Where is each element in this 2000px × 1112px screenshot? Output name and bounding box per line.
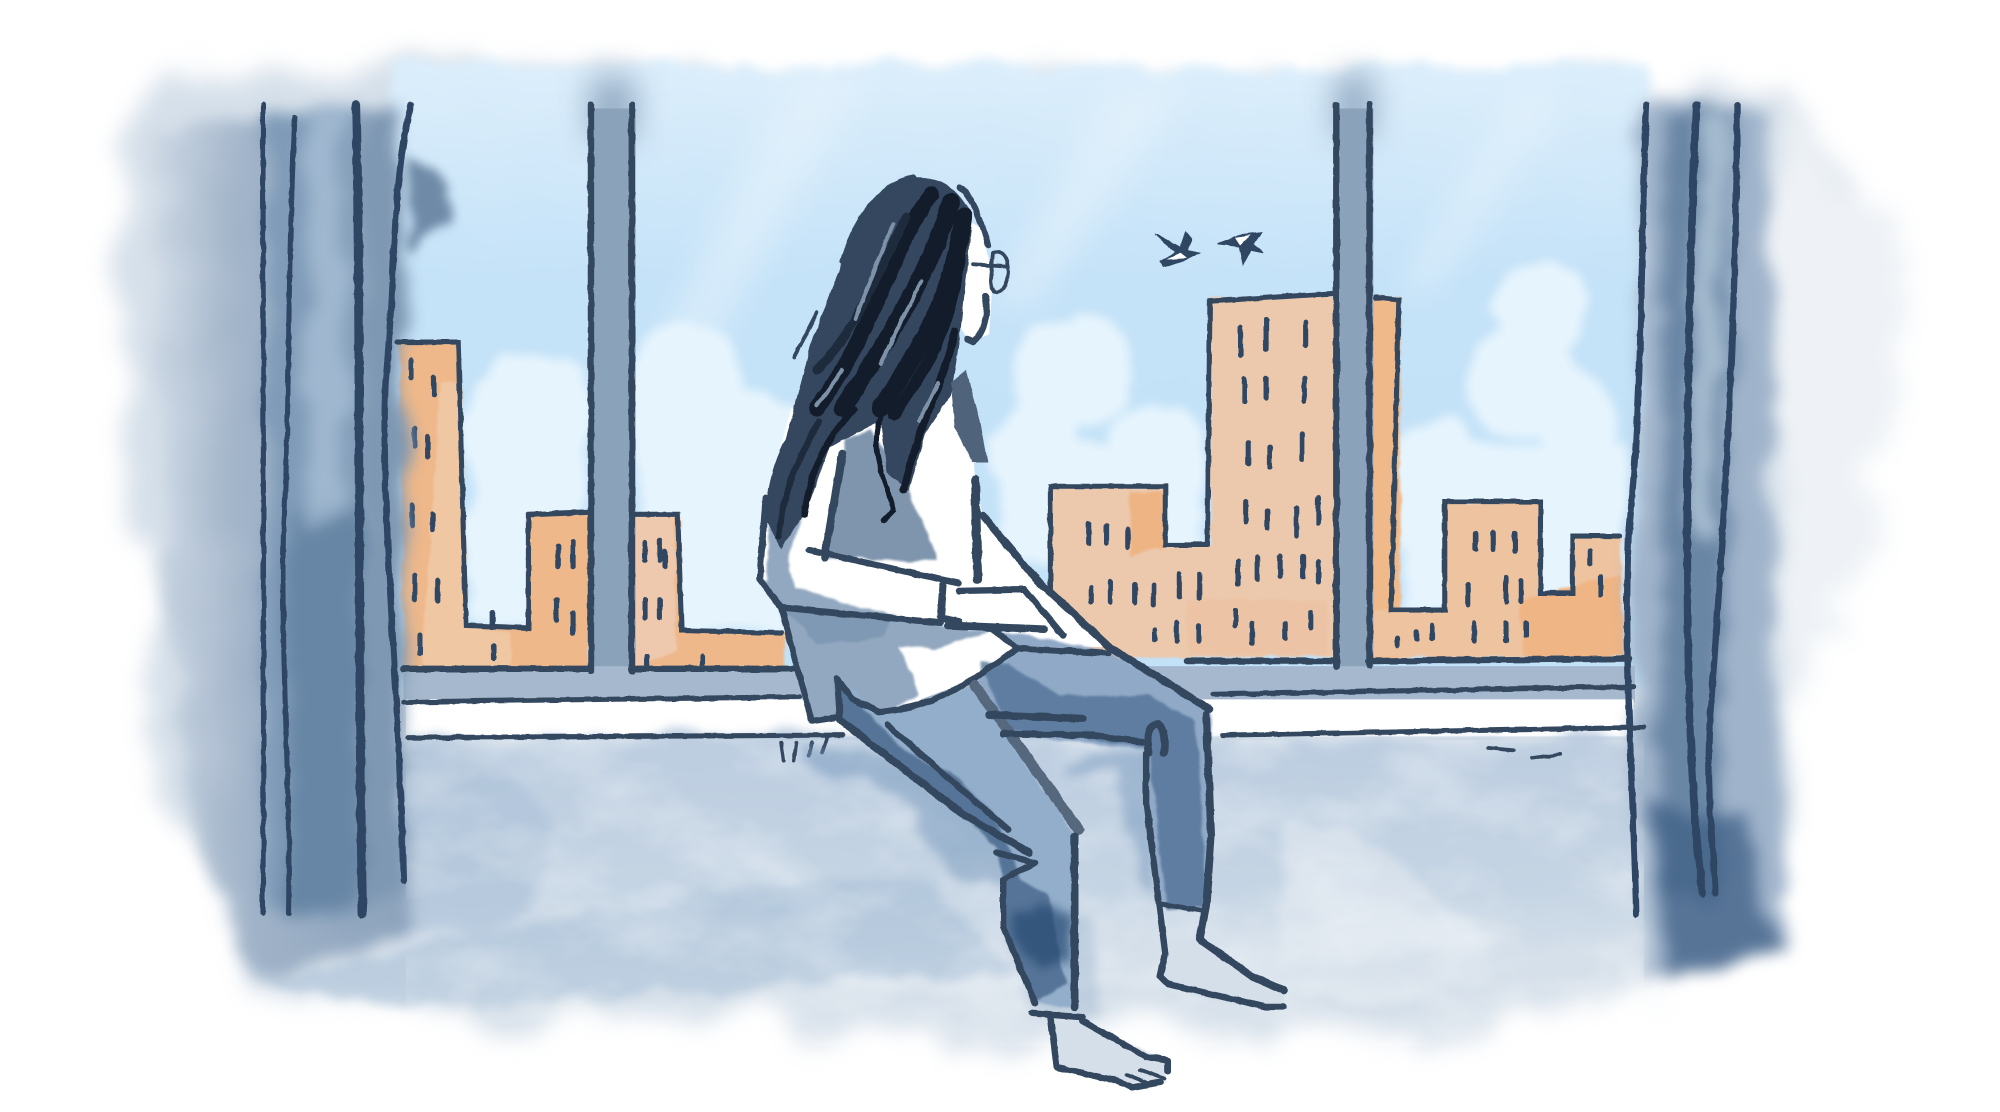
woman: near leg shading [835, 676, 1066, 1003]
watercolor background wash [115, 70, 1908, 1040]
building windows [411, 319, 1600, 666]
buildings centre [1050, 297, 1400, 661]
woman: torso sweater [759, 383, 1109, 721]
window sill [406, 699, 1634, 736]
left curtain folds [262, 105, 411, 914]
woman: far leg shading [980, 664, 1206, 909]
woman: feet [1050, 938, 1284, 1085]
birds [1155, 232, 1264, 267]
buildings right [1372, 502, 1623, 657]
floor wall wash [255, 738, 1646, 1008]
window frame and mullions [403, 74, 1635, 702]
woman: face [955, 217, 993, 342]
woman: hair [766, 177, 988, 549]
right curtain wash [1634, 108, 1787, 983]
clouds [466, 258, 1627, 638]
woman: glasses and outlines [759, 188, 1284, 1087]
sky [388, 64, 1645, 689]
window outlines [397, 105, 1644, 761]
sky light streaks [625, 77, 1570, 408]
woman [759, 177, 1284, 1087]
woman: near leg [835, 676, 1075, 1007]
curtain blot near window [408, 160, 448, 255]
woman: torso shading [759, 430, 990, 721]
woman: cast shadows on wall [791, 747, 1155, 1021]
woman: near shin dark wash [1011, 913, 1072, 976]
left curtain wash [153, 105, 408, 983]
buildings left [398, 342, 785, 669]
watercolor mottling on wall [406, 740, 1644, 1030]
woman: far leg and thigh [975, 629, 1212, 906]
right curtain folds [1627, 105, 1737, 914]
